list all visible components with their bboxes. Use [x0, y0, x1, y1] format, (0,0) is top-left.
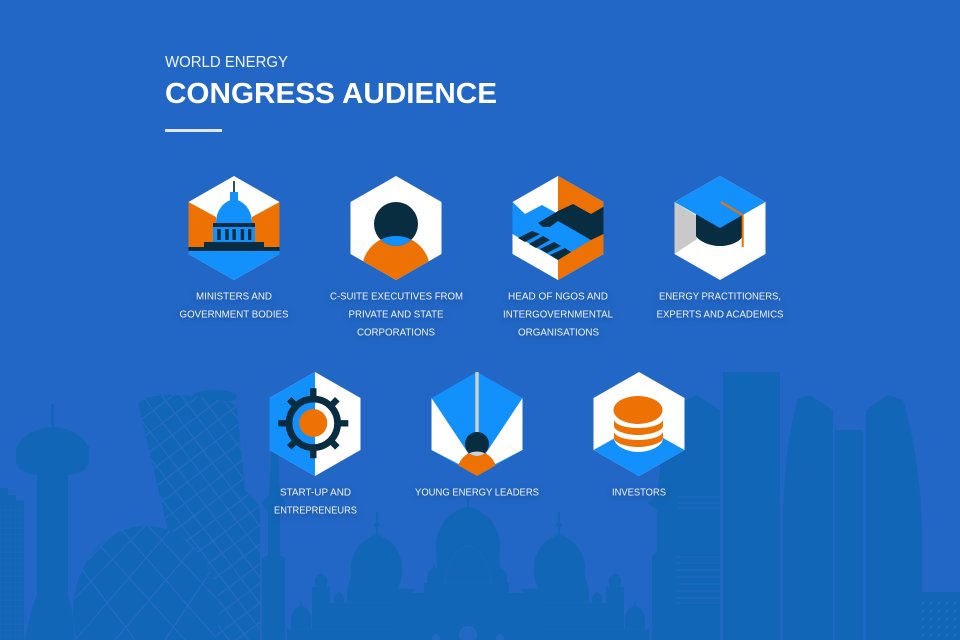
label	[180, 292, 289, 320]
label: ENTREPRENEURS	[274, 506, 357, 516]
icon: coin stack	[594, 372, 684, 476]
capital gate leaning tower	[138, 390, 260, 640]
label: YOUNG ENERGY LEADERS	[415, 488, 539, 498]
mosque faint outlines	[290, 545, 646, 629]
icon: young leader	[432, 372, 522, 476]
label: MINISTERS AND	[196, 292, 272, 302]
left stepped building	[0, 488, 24, 640]
minaret left	[261, 425, 286, 640]
lattice sphere building	[73, 526, 219, 640]
central low tower	[835, 430, 863, 640]
panel: practitioners	[656, 176, 784, 320]
label	[656, 292, 784, 320]
bottom right building	[920, 592, 960, 640]
icon: handshake	[512, 176, 604, 280]
label: ENERGY PRACTITIONERS,	[659, 292, 781, 302]
icon: capitol building	[188, 176, 280, 280]
label: CORPORATIONS	[357, 328, 435, 338]
mosque right wing and dome	[523, 512, 649, 640]
title line one: WORLD ENERGY	[165, 54, 288, 71]
right curved tower	[866, 395, 922, 640]
panel: c-suite	[330, 176, 463, 338]
panel: start-ups	[265, 372, 361, 516]
label: ORGANISATIONS	[518, 328, 599, 338]
label: INTERGOVERNMENTAL	[503, 310, 613, 320]
label	[274, 488, 357, 516]
mosque central block	[413, 498, 523, 640]
label: GOVERNMENT BODIES	[180, 310, 289, 320]
mosque finial balls and arches	[374, 522, 562, 640]
panel: young leaders	[415, 372, 539, 498]
panel: investors	[594, 372, 684, 498]
tall rectangular tower	[723, 372, 780, 640]
icon: gear	[265, 372, 361, 476]
label: HEAD OF NGOS AND	[508, 292, 608, 302]
observation tower	[16, 404, 89, 640]
label	[330, 292, 463, 338]
panel: ministers	[180, 176, 289, 320]
curved tower	[783, 395, 833, 640]
icon: graduation cap	[674, 176, 766, 280]
label: C-SUITE EXECUTIVES FROM	[330, 292, 463, 302]
label	[503, 292, 613, 338]
title line two: CONGRESS AUDIENCE	[165, 78, 497, 110]
skyline silhouette	[0, 372, 960, 640]
panel: ngos	[503, 176, 613, 338]
label: PRIVATE AND STATE	[348, 310, 444, 320]
label: INVESTORS	[612, 488, 666, 498]
mosque left wing and dome	[287, 512, 413, 640]
grand mosque	[287, 498, 649, 640]
right minaret with bands	[648, 395, 720, 640]
heading	[165, 54, 497, 132]
label: EXPERTS AND ACADEMICS	[656, 310, 784, 320]
title underline	[165, 129, 222, 132]
label: START-UP AND	[280, 488, 351, 498]
icon: executive	[350, 176, 442, 280]
